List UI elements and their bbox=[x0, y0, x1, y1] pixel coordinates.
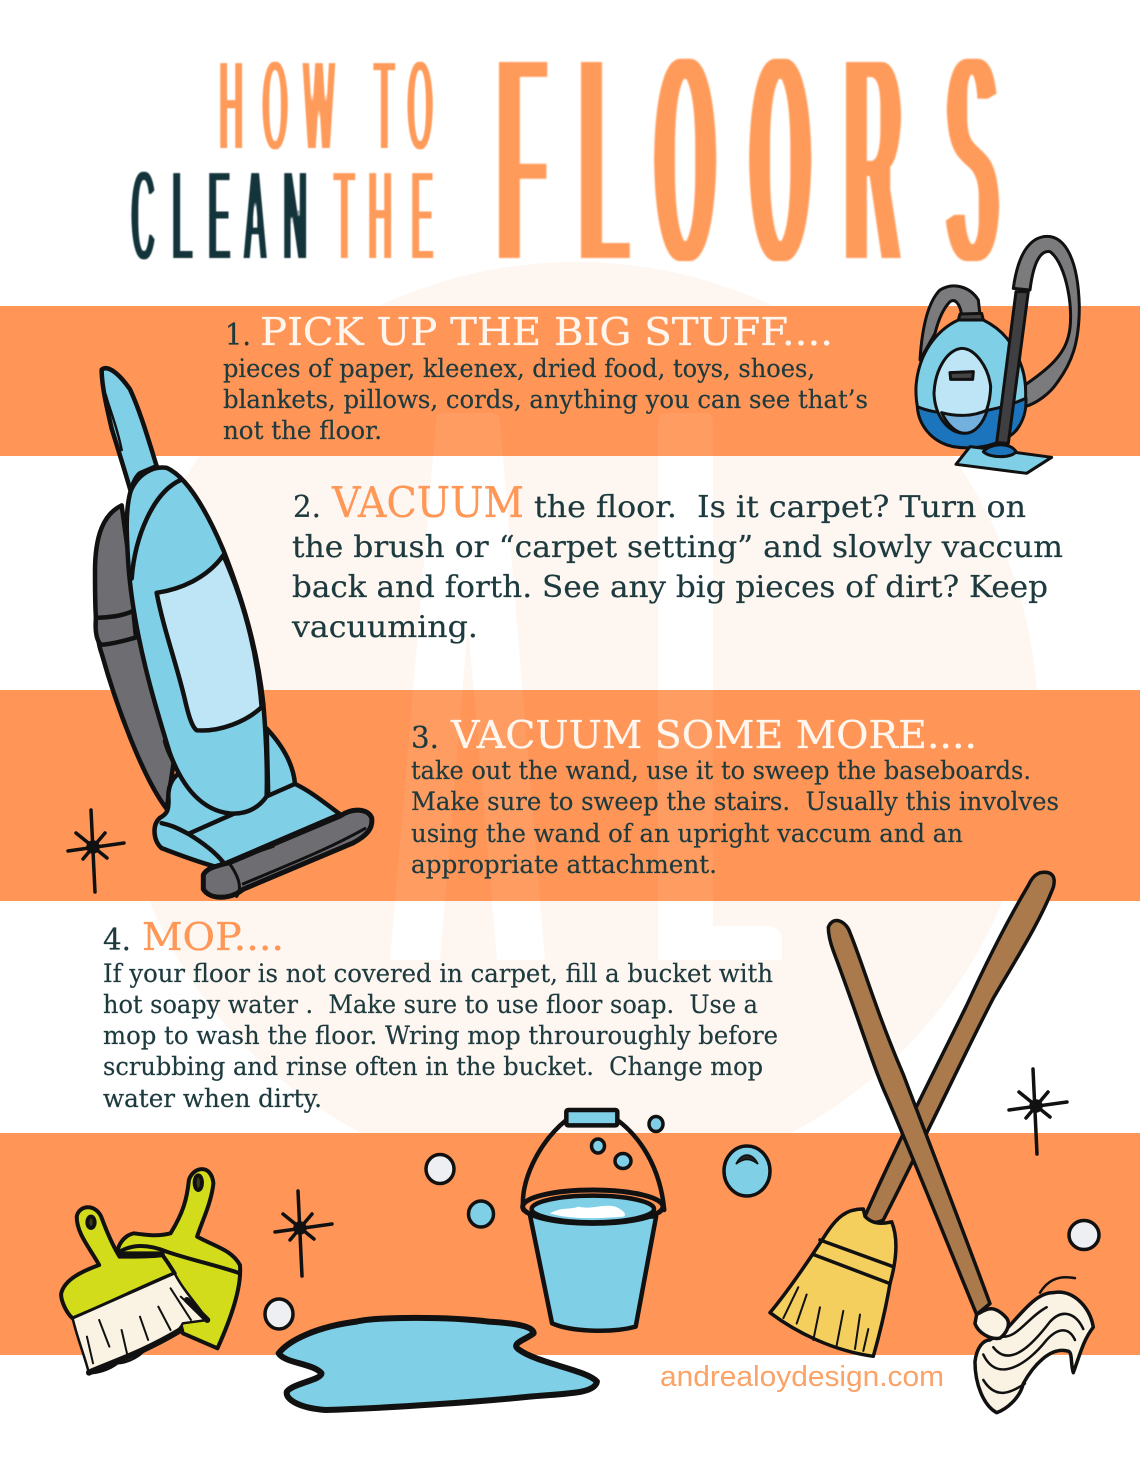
title: how to: HOW TO bbox=[219, 30, 433, 181]
sparkle bbox=[1009, 1069, 1067, 1154]
icon: upright vacuum bbox=[95, 368, 372, 897]
step 1 text: pieces of paper, kleenex, dried food, toys, shoes, bbox=[223, 354, 815, 383]
step 3 text: appropriate attachment. bbox=[411, 850, 717, 879]
bubble bbox=[426, 1154, 454, 1184]
watermark monogram bbox=[114, 262, 1038, 1186]
bubble bbox=[1069, 1220, 1099, 1250]
icon: sparkle left bbox=[68, 810, 124, 892]
bubble bbox=[265, 1299, 293, 1329]
icon: bubbles and sparkle middle bbox=[265, 1069, 1099, 1329]
title: clean: CLEAN bbox=[131, 140, 307, 291]
title bbox=[131, 0, 997, 335]
bubble bbox=[468, 1201, 494, 1227]
step 3 text: Make sure to sweep the stairs. Usually this involves bbox=[411, 787, 1059, 816]
step 2 text: 2. bbox=[293, 490, 321, 525]
step 3 text bbox=[411, 713, 1059, 879]
step 4 text: water when dirty. bbox=[103, 1084, 322, 1113]
icon: bucket bbox=[523, 1110, 664, 1331]
step 4 text bbox=[103, 915, 778, 1113]
step 2 text: back and forth. See any big pieces of dirt? Keep bbox=[292, 570, 1048, 605]
icon: dustpan and brush bbox=[61, 1169, 240, 1373]
step 4 text: scrubbing and rinse often in the bucket. Change mop bbox=[103, 1052, 763, 1081]
step 4 text: 4. bbox=[103, 923, 131, 958]
step 2 text: vacuuming. bbox=[291, 610, 478, 645]
step 1 text: blankets, pillows, cords, anything you can see that’s bbox=[223, 385, 868, 414]
step 3 text: take out the wand, use it to sweep the baseboards. bbox=[411, 756, 1031, 785]
step 3 text: VACUUM SOME MORE.... bbox=[450, 713, 977, 757]
bubble bbox=[649, 1116, 663, 1132]
bubble highlight bbox=[736, 1155, 758, 1164]
step 2 text: VACUUM bbox=[331, 478, 524, 527]
icon: broom and mop bbox=[770, 872, 1093, 1413]
title: the: THE bbox=[334, 140, 434, 291]
step 2 text: the brush or “carpet setting” and slowly vaccum bbox=[292, 530, 1063, 565]
step 3 text: 3. bbox=[411, 721, 439, 756]
orange bands bbox=[0, 306, 1140, 1355]
step 1 text bbox=[223, 310, 868, 445]
website credit: andrealoydesign.com bbox=[660, 1361, 944, 1393]
step 1 text: not the floor. bbox=[223, 416, 382, 445]
icon: canister vacuum bbox=[916, 236, 1079, 473]
step 4 text: If your floor is not covered in carpet, fill a bucket with bbox=[103, 959, 773, 988]
step 2 text bbox=[291, 478, 1063, 645]
large bubble bbox=[724, 1146, 770, 1196]
bubble bbox=[592, 1139, 604, 1153]
icon: water puddle bbox=[279, 1318, 597, 1410]
sparkle bbox=[275, 1191, 332, 1276]
step 4 text: hot soapy water . Make sure to use floor soap. Use a bbox=[103, 990, 758, 1019]
step 1 text: 1. bbox=[225, 318, 251, 353]
step 4 text: mop to wash the floor. Wring mop throuroughly before bbox=[103, 1021, 778, 1050]
bubble bbox=[615, 1154, 631, 1168]
step 1 text: PICK UP THE BIG STUFF.... bbox=[260, 310, 833, 354]
step 3 text: using the wand of an upright vaccum and an bbox=[411, 819, 963, 848]
step 4 text: MOP.... bbox=[142, 915, 284, 959]
step 2 text: the floor. Is it carpet? Turn on bbox=[534, 490, 1026, 525]
